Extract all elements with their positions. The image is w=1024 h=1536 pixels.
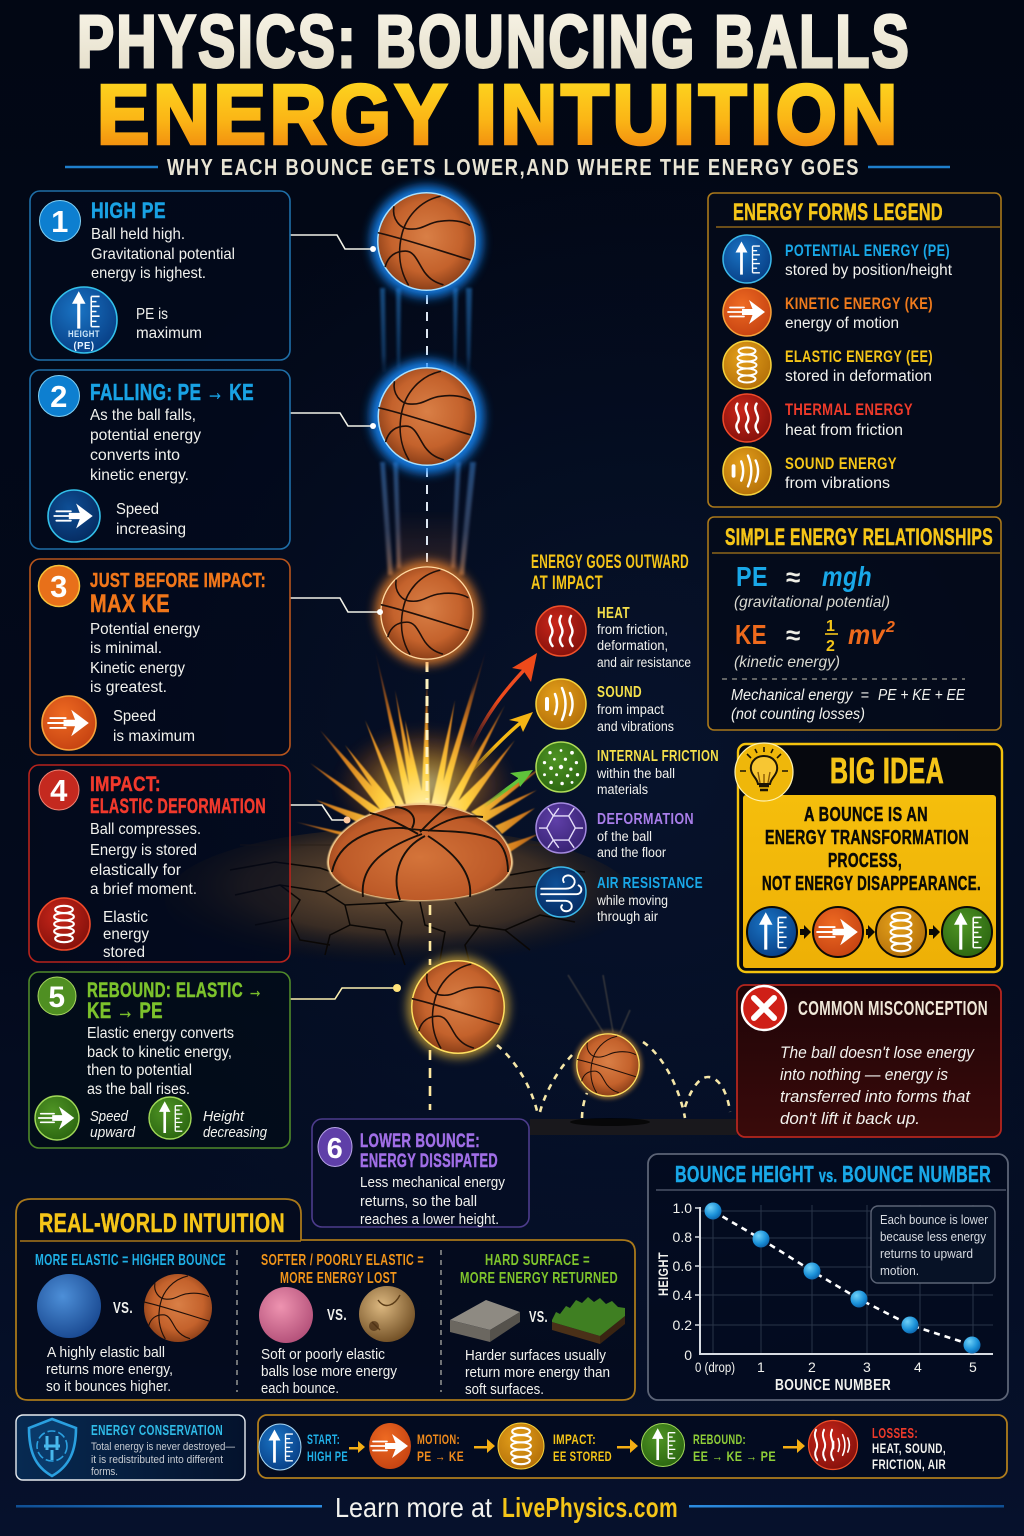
conservation text — [91, 1441, 235, 1478]
formula: kinetic energy: 1 — [826, 618, 835, 635]
step 2 description: potential energy — [90, 427, 201, 444]
outward heading: AT IMPACT — [531, 573, 603, 594]
panel: step 3 before impact — [30, 559, 290, 755]
step 5 heading: REBOUND: ELASTIC → — [87, 979, 263, 1002]
panel: step 6 lower bounce — [312, 1119, 529, 1228]
chart note: because less energy — [880, 1229, 986, 1244]
column: more elastic: MORE ELASTIC = HIGHER BOUNCE — [35, 1252, 226, 1269]
line chart: height vs bounce number: HEIGHT — [655, 1252, 671, 1296]
step 2 description — [90, 407, 201, 484]
legend item: sound energy — [723, 447, 897, 495]
outward item: sound — [536, 679, 674, 734]
column: softer ball: SOFTER / POORLY ELASTIC = — [261, 1252, 424, 1269]
step number 5: 5 — [48, 981, 66, 1014]
outward item: heat: deformation, — [597, 638, 668, 653]
arrows: energy going outward from impact — [463, 653, 537, 807]
line chart: height vs bounce number: 0.8 — [673, 1229, 692, 1245]
step 4 description: elastically for — [90, 862, 182, 879]
step 5 description: back to kinetic energy, — [87, 1044, 232, 1061]
outward item: air resistance: while moving — [596, 893, 668, 908]
elastic energy stored note — [103, 909, 149, 961]
step 6 description: returns, so the ball — [360, 1193, 477, 1210]
column: softer ball: VS. — [327, 1307, 347, 1324]
column: more elastic — [35, 1252, 226, 1395]
panel: step 5 rebound — [29, 972, 290, 1148]
formula: kinetic energy: 2 — [885, 619, 895, 636]
step number 5 — [38, 977, 76, 1015]
step number 4: 4 — [50, 773, 68, 808]
step 3 description: Potential energy — [90, 621, 200, 638]
step 3 description — [90, 621, 200, 696]
formula: kinetic energy: (kinetic energy) — [734, 654, 840, 671]
outward item: heat: from friction, — [597, 622, 668, 637]
dashed bounce trajectory — [497, 1042, 737, 1135]
formula: kinetic energy: mv — [848, 619, 886, 650]
outward item: sound: and vibrations — [597, 719, 674, 734]
icon: height PE gauge — [51, 287, 117, 353]
outward item: heat: HEAT — [597, 605, 630, 622]
column: softer ball: Soft or poorly elastic — [261, 1347, 385, 1363]
transformation icon chain — [747, 907, 992, 957]
step number 6: 6 — [327, 1133, 343, 1165]
formula: potential energy: mgh — [822, 561, 872, 592]
flow step: rebound: REBOUND: — [693, 1431, 746, 1447]
arrow — [349, 1441, 365, 1453]
icon: spring red — [38, 898, 90, 950]
height decreasing note — [203, 1109, 267, 1141]
legend item: thermal energy: heat from friction — [785, 422, 903, 439]
step 4 description: Ball compresses. — [90, 821, 201, 838]
ball 1: high — [370, 186, 482, 298]
formula: potential energy: ≈ — [786, 562, 801, 592]
formula: kinetic energy: ≈ — [786, 620, 801, 650]
impact burst and cracked ground — [165, 647, 635, 1110]
step 1 description — [91, 226, 235, 282]
outward item: heat — [536, 605, 691, 670]
big idea heading: BIG IDEA — [830, 750, 944, 791]
step 4 description — [90, 821, 201, 898]
flow step: motion: PE → KE — [417, 1448, 464, 1464]
mechanical energy equation: Mechanical energy = — [731, 687, 869, 704]
step number 1: 1 — [51, 204, 69, 239]
PE is maximum note: maximum — [136, 325, 202, 342]
step 4 description: Energy is stored — [90, 842, 197, 859]
arrow — [617, 1439, 638, 1453]
speed increasing note: Speed — [116, 501, 159, 518]
step 1 heading: HIGH PE — [91, 198, 166, 223]
title: energy intuition: ENERGY INTUITION — [97, 68, 901, 162]
icon: height green — [149, 1097, 191, 1139]
height decreasing note: decreasing — [203, 1125, 267, 1141]
speed upward note — [90, 1109, 136, 1141]
flow step: impact — [498, 1423, 612, 1469]
elastic energy stored note: stored — [103, 944, 145, 961]
line chart: height vs bounce number: 0.4 — [673, 1287, 692, 1303]
outward item: sound: SOUND — [597, 684, 642, 701]
chart note: returns to upward — [880, 1246, 973, 1261]
conservation text: Total energy is never destroyed— — [91, 1441, 235, 1453]
step 1 description: energy is highest. — [91, 265, 206, 282]
ball 5: rebound — [407, 956, 509, 1058]
speed maximum note — [113, 708, 195, 745]
line chart: height vs bounce number: 1.0 — [673, 1200, 692, 1216]
footer: learn more — [16, 1492, 1004, 1523]
line chart: height vs bounce number: 3 — [863, 1359, 871, 1375]
misconception text: The ball doesn't lose energy — [780, 1043, 975, 1062]
legend item: thermal energy: THERMAL ENERGY — [785, 400, 913, 419]
arrow — [474, 1439, 495, 1453]
legend item: kinetic energy: energy of motion — [785, 315, 899, 332]
outward item: heat: and air resistance — [597, 655, 691, 670]
icon: X mark — [742, 986, 786, 1030]
chart note — [871, 1206, 995, 1283]
step 4 heading: ELASTIC DEFORMATION — [90, 795, 266, 818]
legend item: sound energy: from vibrations — [785, 475, 890, 492]
step number 3: 3 — [50, 569, 68, 604]
step 6 description: Less mechanical energy — [360, 1174, 505, 1191]
column: more elastic: so it bounces higher. — [46, 1379, 171, 1395]
outward item: air resistance: AIR RESISTANCE — [597, 875, 703, 892]
legend item: potential energy — [723, 235, 953, 283]
flow step: start — [259, 1424, 348, 1470]
outward item: internal friction: materials — [597, 782, 648, 797]
mechanical energy equation: PE + KE + EE — [878, 687, 966, 704]
step 3 heading — [90, 570, 266, 618]
column: hard surface: return more energy than — [465, 1365, 610, 1381]
legend item: elastic energy — [723, 341, 933, 389]
legend item: sound energy: SOUND ENERGY — [785, 454, 897, 473]
step 5 description: as the ball rises. — [87, 1081, 190, 1098]
conservation text: forms. — [91, 1466, 118, 1478]
conservation heading: ENERGY CONSERVATION — [91, 1423, 223, 1439]
step number 6 — [318, 1128, 352, 1166]
misconception text: don't lift it back up. — [780, 1109, 920, 1128]
outward heading — [531, 552, 689, 594]
step 5 heading: KE → PE — [87, 998, 163, 1023]
formula: kinetic energy — [734, 618, 895, 671]
line chart: height vs bounce number — [655, 1200, 993, 1394]
outward item: sound: from impact — [597, 702, 664, 717]
column: more elastic: A highly elastic ball — [47, 1345, 165, 1361]
legend item: elastic energy: ELASTIC ENERGY (EE) — [785, 347, 933, 366]
panel: bounce height chart — [648, 1154, 1008, 1400]
outward heading: ENERGY GOES OUTWARD — [531, 552, 689, 573]
column: more elastic: returns more energy, — [46, 1362, 173, 1378]
rays — [420, 660, 434, 800]
outward item: internal friction: within the ball — [596, 766, 675, 781]
line chart: height vs bounce number: 2 — [808, 1359, 816, 1375]
big idea statement: PROCESS, — [828, 850, 902, 872]
flow step: losses: FRICTION, AIR — [872, 1457, 946, 1472]
icon: speed upward green — [35, 1096, 79, 1140]
outward item: deformation: and the floor — [597, 845, 666, 860]
outward item: deformation: DEFORMATION — [597, 811, 694, 828]
panel: common misconception — [737, 985, 1001, 1137]
line chart: height vs bounce number: 1 — [757, 1359, 765, 1375]
flow step: impact: IMPACT: — [553, 1431, 596, 1447]
step 6 heading: ENERGY DISSIPATED — [360, 1151, 498, 1172]
column: hard surface: VS. — [529, 1309, 548, 1326]
ball 2: falling — [370, 360, 484, 474]
line chart: height vs bounce number: 0 (drop) — [695, 1359, 735, 1375]
ball 3: before impact — [375, 561, 479, 665]
panel: big idea — [735, 743, 1002, 972]
icon: shield — [29, 1419, 76, 1476]
line chart: height vs bounce number: BOUNCE NUMBER — [775, 1377, 891, 1394]
PE is maximum note — [136, 306, 202, 342]
icon: speed arrow orange — [42, 696, 96, 750]
step 5 description: then to potential — [87, 1062, 192, 1079]
step number 3 — [38, 566, 80, 606]
misconception text — [780, 1043, 975, 1128]
flow step: motion — [369, 1423, 464, 1469]
column: hard surface: HARD SURFACE = — [485, 1252, 590, 1269]
flow step: start: START: — [307, 1431, 340, 1447]
icon: light bulb — [735, 743, 793, 801]
speed increasing note: increasing — [116, 521, 186, 538]
speed upward note: upward — [90, 1125, 136, 1141]
step 4 heading: IMPACT: — [90, 773, 161, 796]
mechanical energy equation: (not counting losses) — [731, 706, 865, 723]
column: softer ball — [259, 1252, 424, 1397]
PE is maximum note: PE is — [136, 306, 168, 323]
mechanical energy equation — [731, 687, 966, 723]
panel: real-world intuition — [16, 1199, 635, 1400]
step 6 heading: LOWER BOUNCE: — [360, 1131, 480, 1152]
flow step: start: HIGH PE — [307, 1448, 348, 1464]
step number 1 — [40, 200, 80, 242]
step 4 heading — [90, 773, 266, 818]
elastic energy stored note: energy — [103, 926, 149, 943]
flow step: impact: EE STORED — [553, 1448, 612, 1464]
step 1 description: Gravitational potential — [91, 246, 235, 263]
step 4 description: a brief moment. — [90, 881, 197, 898]
column: hard surface: MORE ENERGY RETURNED — [460, 1270, 618, 1287]
panel: energy goes outward at impact — [531, 552, 719, 924]
flow step: losses: HEAT, SOUND, — [872, 1441, 946, 1456]
step 5 description — [87, 1025, 234, 1098]
elastic energy stored note: Elastic — [103, 909, 148, 926]
panel: energy conservation — [16, 1415, 245, 1480]
formula: potential energy: (gravitational potential) — [734, 594, 890, 611]
outward item: deformation: of the ball — [597, 829, 652, 844]
big idea statement — [762, 804, 981, 895]
flow step: motion: MOTION: — [417, 1431, 460, 1447]
outward item: internal friction: INTERNAL FRICTION — [597, 748, 719, 765]
central drop path with motion streaks — [380, 288, 476, 575]
outward item: deformation — [536, 803, 694, 860]
step 1 description: Ball held high. — [91, 226, 185, 243]
column: more elastic: VS. — [113, 1300, 133, 1317]
speed maximum note: Speed — [113, 708, 156, 725]
step 2 heading: FALLING: PE → KE — [90, 379, 254, 405]
step 2 description: converts into — [90, 447, 180, 464]
formula: kinetic energy: 2 — [826, 638, 835, 655]
big idea statement: A BOUNCE IS AN — [804, 804, 928, 826]
icon: height PE gauge: HEIGHT — [68, 329, 100, 339]
panel: step 4 impact — [29, 765, 290, 962]
panel: step 2 falling — [30, 370, 290, 549]
chart note: motion. — [880, 1263, 919, 1278]
line chart: height vs bounce number: 4 — [914, 1359, 922, 1375]
column: hard surface: Harder surfaces usually — [465, 1348, 607, 1364]
legend item: thermal energy — [723, 394, 913, 442]
height decreasing note: Height — [203, 1109, 245, 1125]
ball 4: compressed at impact — [327, 803, 513, 901]
icon: height PE gauge: (PE) — [74, 341, 94, 352]
step 2 description: kinetic energy. — [90, 467, 189, 484]
step 3 heading: MAX KE — [90, 590, 170, 618]
flow step: losses — [808, 1420, 946, 1472]
outward item: internal friction — [536, 742, 719, 797]
speed upward note: Speed — [90, 1109, 129, 1125]
legend item: kinetic energy — [723, 288, 933, 336]
flow step: rebound: EE → KE → PE — [693, 1448, 776, 1464]
step 5 description: Elastic energy converts — [87, 1025, 234, 1042]
misconception text: transferred into forms that — [780, 1087, 971, 1106]
column: softer ball: balls lose more energy — [261, 1364, 398, 1380]
legend item: potential energy: stored by position/height — [785, 262, 953, 279]
step 6 heading — [360, 1131, 498, 1172]
icon: speed arrow blue — [48, 490, 100, 542]
column: hard surface — [450, 1252, 625, 1398]
legend item: kinetic energy: KINETIC ENERGY (KE) — [785, 294, 933, 313]
speed increasing note — [116, 501, 186, 538]
step 6 description: reaches a lower height. — [360, 1211, 499, 1228]
formula: potential energy — [734, 561, 890, 611]
column: softer ball: each bounce. — [261, 1381, 339, 1397]
step 5 heading — [87, 979, 263, 1023]
footer: learn more: LivePhysics.com — [502, 1492, 678, 1523]
flow step: losses: LOSSES: — [872, 1425, 918, 1442]
step number 2: 2 — [50, 379, 68, 414]
outward item: air resistance: through air — [597, 909, 658, 924]
step number 2 — [38, 376, 80, 416]
conservation text: it is redistributed into different — [91, 1454, 223, 1466]
step 3 description: is greatest. — [90, 679, 167, 696]
line chart: height vs bounce number: 0.6 — [673, 1258, 692, 1274]
formula: kinetic energy: KE — [735, 619, 767, 650]
column: softer ball: MORE ENERGY LOST — [280, 1270, 397, 1287]
real-world heading: REAL-WORLD INTUITION — [39, 1208, 285, 1238]
step 3 description: is minimal. — [90, 640, 162, 657]
legend item: elastic energy: stored in deformation — [785, 368, 932, 385]
footer: learn more: Learn more at — [335, 1492, 492, 1523]
chart note: Each bounce is lower — [880, 1212, 989, 1227]
step 2 description: As the ball falls, — [90, 407, 196, 424]
leader lines from steps to balls — [290, 235, 401, 999]
panel: step 1 high PE — [30, 191, 290, 360]
step 6 description — [360, 1174, 505, 1228]
step 3 heading: JUST BEFORE IMPACT: — [90, 570, 266, 592]
flow step: rebound — [642, 1424, 776, 1466]
formula: potential energy: PE — [736, 561, 768, 592]
step number 4 — [39, 770, 79, 810]
column: hard surface: soft surfaces. — [465, 1382, 544, 1398]
speed maximum note: is maximum — [113, 728, 195, 745]
panel: simple energy relationships — [708, 517, 1001, 730]
line chart: height vs bounce number: 5 — [969, 1359, 977, 1375]
line chart: height vs bounce number: 0 — [684, 1347, 692, 1363]
arrow — [783, 1439, 805, 1453]
misconception text: into nothing — energy is — [780, 1065, 948, 1084]
subtitle: WHY EACH BOUNCE GETS LOWER,AND WHERE THE ENERGY GOES — [167, 154, 860, 180]
outward item: air resistance — [536, 867, 703, 924]
ball 6: lower bounce — [568, 975, 642, 1099]
line chart: height vs bounce number: 0.2 — [673, 1317, 692, 1333]
legend item: potential energy: POTENTIAL ENERGY (PE) — [785, 241, 950, 260]
step 3 description: Kinetic energy — [90, 660, 185, 677]
panel: energy flow summary — [258, 1415, 1007, 1478]
panel: energy forms legend — [708, 193, 1001, 507]
